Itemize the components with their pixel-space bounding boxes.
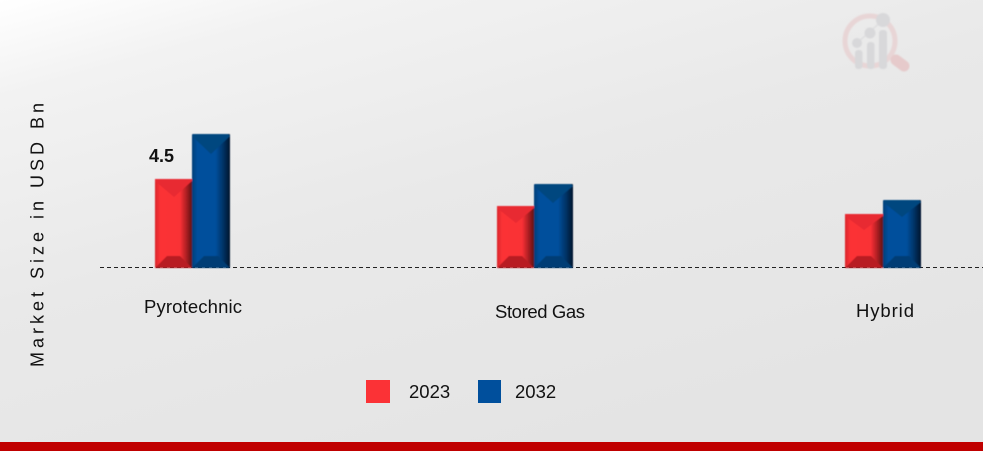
bar: Hybrid 2032 (883, 200, 921, 268)
bar: Hybrid 2023 (845, 214, 883, 268)
watermark logo (845, 13, 904, 69)
legend item: 2023 (366, 380, 450, 403)
legend item: 2032: 2032 (515, 381, 556, 402)
bar: Stored Gas 2023 (497, 206, 534, 268)
category label: Stored Gas: Stored Gas (495, 301, 585, 322)
bar group: Pyrotechnic (155, 134, 230, 268)
bar group: Hybrid (845, 200, 921, 268)
bar: Pyrotechnic 2032 (192, 134, 230, 268)
bar: Stored Gas 2032 (534, 184, 573, 268)
category label: Hybrid: Hybrid (856, 300, 914, 321)
bar group: Stored Gas (497, 184, 573, 268)
value label: 4.5 (149, 146, 174, 166)
legend item: 2023: 2023 (409, 381, 450, 402)
baseline (100, 266, 983, 268)
category label: Pyrotechnic: Pyrotechnic (144, 296, 242, 317)
bottom band (0, 442, 983, 451)
y axis title: Market Size in USD Bn (28, 99, 48, 367)
legend (366, 380, 556, 403)
legend item: 2032 (478, 380, 556, 403)
bar: Pyrotechnic 2023 (155, 179, 192, 268)
